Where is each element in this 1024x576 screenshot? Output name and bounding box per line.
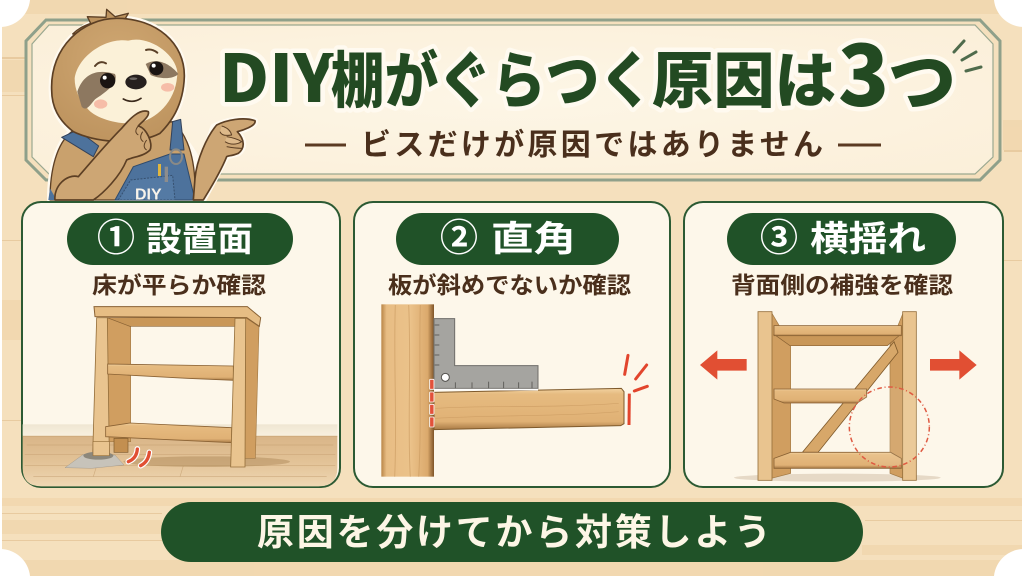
thinking arm (55, 111, 151, 200)
carpenter square (434, 319, 538, 388)
subheading 3: 背面側の補強を確認 (731, 266, 953, 300)
panel 1: 設置面 (22, 202, 340, 487)
heading pill 3: 横揺れ (810, 211, 926, 262)
heading pill 2: 直角 (491, 211, 576, 262)
heading pill 1 (67, 207, 293, 265)
dashed circle (849, 387, 929, 467)
diagonal brace (802, 342, 898, 452)
pointing arm (193, 119, 255, 200)
title text: 棚がぐらつく (331, 31, 653, 120)
sloth mascot (48, 9, 255, 203)
subtitle: ビスだけが原因ではありません (361, 120, 823, 164)
heading pill 3 (727, 207, 956, 265)
gap marks (430, 379, 434, 427)
sloth halo (50, 18, 255, 200)
sloth body (50, 122, 195, 200)
title text: つ (888, 27, 956, 126)
overalls (48, 119, 195, 203)
wobble marks (128, 449, 149, 466)
panel 3: 横揺れ (684, 202, 1003, 487)
bottom message bar: 原因を分けてから対策しよう (257, 502, 771, 556)
bottom message bar (161, 502, 863, 562)
subheading 2: 板が斜めでないか確認 (388, 266, 631, 300)
heading pill 2 (396, 207, 619, 265)
title text: 3 (838, 10, 889, 131)
heading pill 1: 設置面 (146, 212, 253, 261)
braced shelf illustration (700, 312, 977, 482)
right arrow (930, 350, 977, 380)
title text (219, 10, 956, 131)
heading pill 3: ③ (760, 207, 798, 262)
accent lines near title (954, 41, 981, 71)
panel 2: 直角 (354, 202, 670, 487)
subheading 1: 床が平らか確認 (92, 266, 266, 300)
heading pill 1: ① (97, 207, 135, 262)
alert lines (625, 355, 647, 425)
shelf on uneven floor illustration (23, 307, 337, 486)
title text: DIY (219, 26, 336, 122)
title banner (26, 10, 1000, 180)
title text: 原因は (652, 31, 836, 120)
heading pill 2: ② (440, 207, 478, 262)
sloth head (52, 9, 184, 141)
left arrow (700, 350, 747, 380)
overalls: DIY (135, 186, 162, 203)
post, board and square illustration (381, 304, 647, 477)
shelf board (434, 388, 624, 430)
